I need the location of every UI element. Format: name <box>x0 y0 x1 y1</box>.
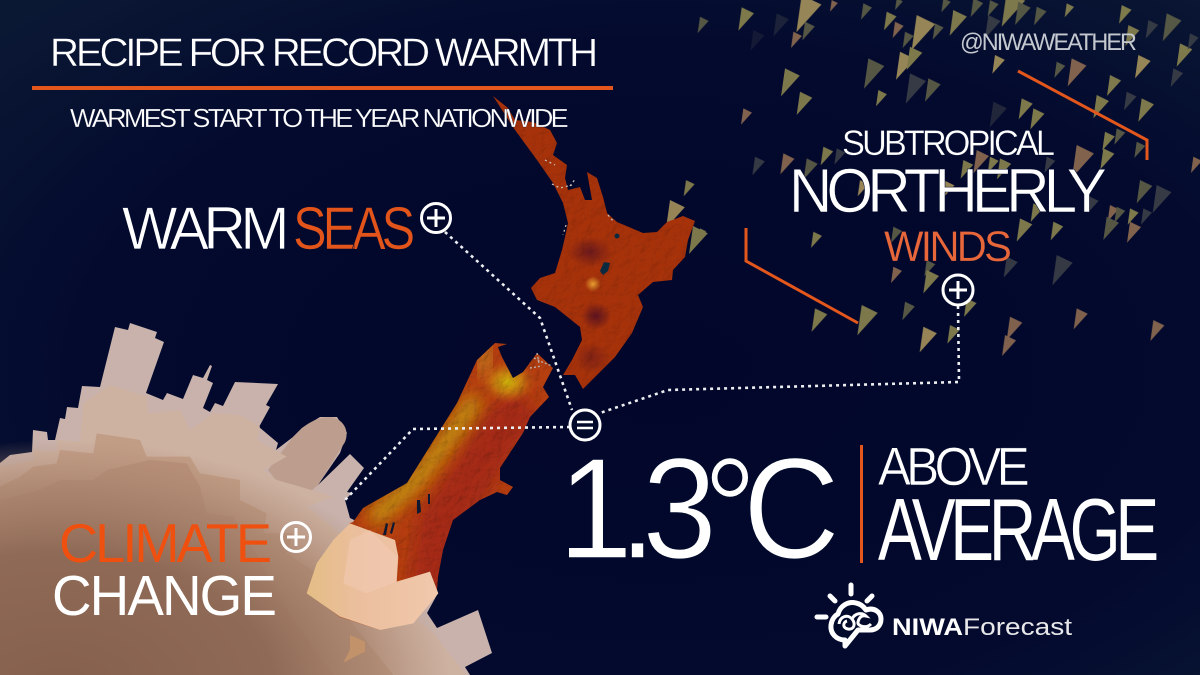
map: South Island <box>322 343 553 630</box>
logo: NIWA Forecast <box>817 585 1072 646</box>
label: subtropical northerly winds: SUBTROPICAL <box>842 124 1054 163</box>
statistic: 1.3 degrees above average: ABOVE <box>878 437 1028 497</box>
logo: NIWA Forecast: NIWA <box>892 614 963 641</box>
icon: plus, winds <box>943 275 973 305</box>
icon: plus, climate change <box>282 522 310 552</box>
wind triangles field <box>666 0 1200 356</box>
label: warm seas <box>122 195 414 262</box>
logo: NIWA Forecast: Forecast <box>963 614 1072 641</box>
map: Marlborough Sounds speckle <box>530 353 552 368</box>
label: climate change <box>52 512 275 628</box>
climate change skyline shape <box>0 323 492 675</box>
statistic: 1.3 degrees above average <box>558 428 1156 589</box>
icon: equals <box>570 410 600 440</box>
dotted connector lines <box>345 232 959 500</box>
label: warm seas: SEAS <box>293 195 414 262</box>
statistic: 1.3 degrees above average: 1.3°C <box>558 428 835 589</box>
label: climate change: CLIMATE <box>59 512 270 574</box>
map: Southland under climate overlay <box>307 523 438 663</box>
twitter handle: @NIWAWEATHER <box>960 29 1137 56</box>
map: North Island coast speckle <box>545 160 614 235</box>
label: subtropical northerly winds <box>789 124 1105 271</box>
label: subtropical northerly winds: NORTHERLY <box>789 157 1105 226</box>
label: subtropical northerly winds: WINDS <box>884 223 1010 271</box>
label: warm seas: WARM <box>122 195 285 262</box>
map: North Island <box>493 96 695 389</box>
title block: WARMEST START TO THE YEAR NATIONWIDE <box>70 103 568 133</box>
label: climate change: CHANGE <box>52 564 275 628</box>
icon: plus, warm seas <box>422 204 450 232</box>
winds bracket <box>746 71 1147 323</box>
title block <box>32 31 613 133</box>
title block: RECIPE FOR RECORD WARMTH <box>50 31 595 75</box>
